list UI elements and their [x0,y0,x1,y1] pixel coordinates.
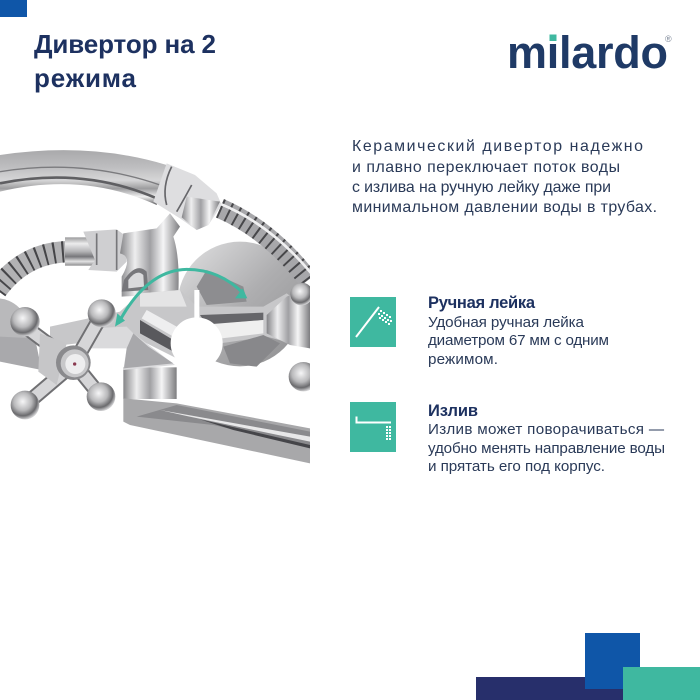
hot indicator [73,362,76,366]
faucet illustration [0,150,318,463]
cross handle left [10,299,116,419]
intro text block [352,138,657,216]
flange facet [197,270,247,305]
arrowhead left [115,313,125,327]
handle ball [11,391,39,419]
cross handle right [266,282,310,392]
main horizontal body [50,290,310,360]
spout pipe [123,398,310,463]
feature description: Удобная ручная лейка [428,314,585,331]
icon: spout [350,402,396,452]
white marker circle [170,318,223,362]
feature: spout [350,402,665,475]
intro text block: минимальном давлении воды в трубах. [352,199,657,216]
logo registered mark: ® [665,34,672,44]
feature heading: Ручная лейка [428,294,536,312]
arrowhead right [235,288,247,298]
feature description: диаметром 67 мм с одним [428,332,609,349]
feature description: и прятать его под корпус. [428,458,605,475]
spout collar [123,367,177,399]
white marker stem [194,290,199,320]
handle ball [10,307,40,336]
spout outlet joint [88,327,175,370]
body left of handle [0,337,42,370]
decorative corner: bottom right [476,633,700,700]
feature description [428,314,609,368]
ribbed hose left [0,252,67,290]
feature description: Излив может поворачиваться — [428,421,665,438]
handle collar [153,163,222,230]
logo accent: teal dot [550,34,556,41]
intro text block: и плавно переключает поток воды [352,159,620,176]
logo: milardo: milardo [507,27,668,78]
wall flange left [0,298,28,338]
upper metal hose handle [0,150,167,205]
feature heading: Излив [428,402,478,420]
icon: hand shower [350,297,396,347]
title: режима [34,63,137,93]
intro text block: с излива на ручную лейку даже при [352,179,611,196]
handle ball [88,299,116,327]
ribbed hose right [220,208,308,280]
hose nut [83,229,127,272]
handle ball [87,382,115,411]
feature description: удобно менять направление воды [428,440,665,457]
feature description [428,421,665,475]
intro text block: Керамический дивертор надежно [352,138,643,155]
diverter elbow [120,213,180,297]
feature description: режимом. [428,351,498,368]
handle hub [56,345,91,380]
rotation arrow [115,269,247,327]
feature: hand shower [350,294,609,368]
hose sleeve [65,237,97,266]
title [34,29,216,93]
wall flange right [178,242,302,366]
decorative corner: top left [0,0,27,17]
title: Дивертор на 2 [34,29,216,59]
